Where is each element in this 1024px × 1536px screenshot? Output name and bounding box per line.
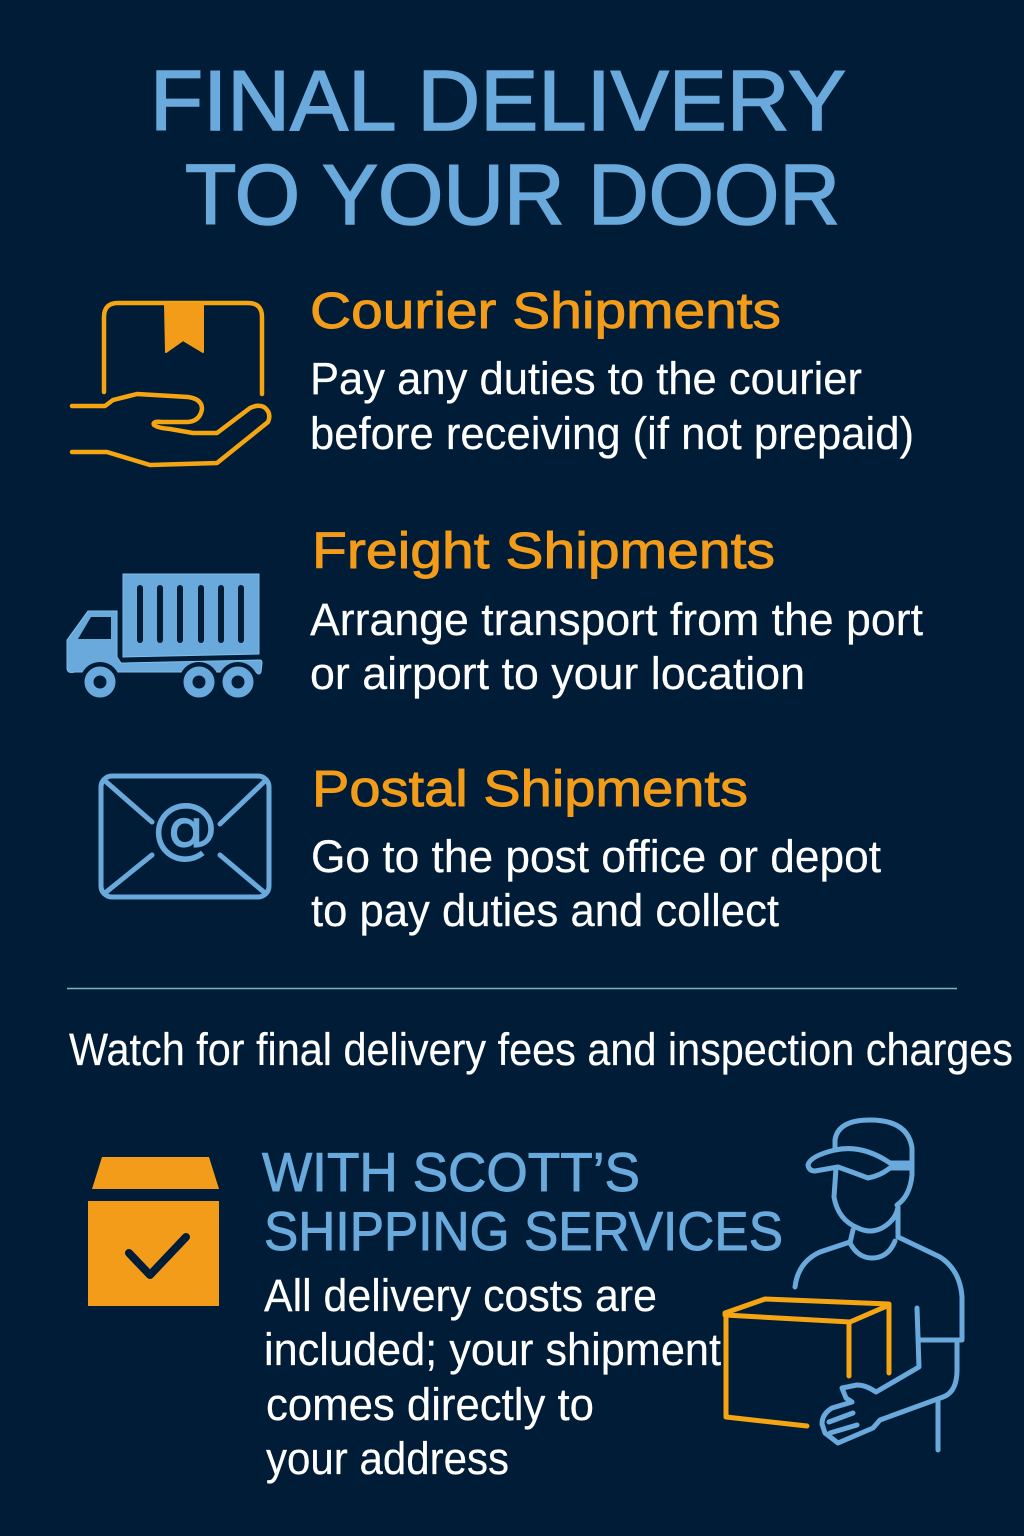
text: postal description (311, 831, 881, 936)
icon: package held in hand (72, 303, 269, 465)
heading: with scott's: WITH SCOTT’S (262, 1141, 640, 1203)
heading: with scott's: SHIPPING SERVICES (264, 1200, 783, 1262)
text: courier description: before receiving (if not prepaid) (310, 408, 914, 459)
panel: freight shipments (67, 522, 923, 702)
icon: envelope with at sign (101, 776, 269, 897)
text: postal description: Go to the post office or depot (311, 831, 881, 882)
title (150, 54, 846, 243)
icon: box with check mark (88, 1157, 219, 1306)
title: TO YOUR DOOR (185, 148, 840, 243)
text: freight description: or airport to your location (310, 648, 805, 699)
text: services description: included; your shipment (264, 1324, 721, 1375)
text: courier description (310, 353, 914, 459)
heading: with scott's (262, 1141, 783, 1262)
panel: with scott's shipping services (88, 1120, 962, 1484)
text: freight description (310, 594, 923, 699)
icon: container truck (67, 574, 262, 702)
text: courier description: Pay any duties to the courier (310, 353, 862, 404)
panel: courier shipments (72, 282, 914, 465)
panel: postal shipments (101, 760, 881, 936)
text: services description: comes directly to (266, 1379, 594, 1430)
heading: freight: Freight Shipments (312, 522, 775, 579)
text: services description: your address (266, 1433, 509, 1484)
icon: envelope with at sign: @ (152, 789, 218, 866)
heading: postal: Postal Shipments (312, 760, 748, 817)
icon: delivery person holding box (725, 1120, 962, 1450)
text: postal description: to pay duties and collect (311, 885, 779, 936)
heading: courier: Courier Shipments (310, 282, 781, 339)
text: services description: All delivery costs are (264, 1270, 657, 1321)
text: freight description: Arrange transport from the port (310, 594, 923, 645)
title: FINAL DELIVERY (150, 54, 846, 149)
text: services description (264, 1270, 721, 1484)
